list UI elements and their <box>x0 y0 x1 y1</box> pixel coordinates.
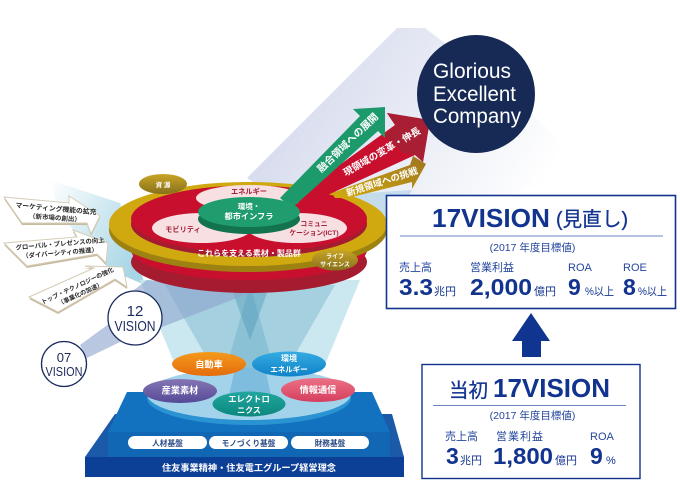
panel: revised 17VISION: %以上 <box>585 285 614 298</box>
goal circle: Glorious Excellent Company: Excellent <box>433 82 516 106</box>
panel: revised 17VISION: (見直し) <box>556 208 628 231</box>
ellipse: communication <box>247 213 347 243</box>
icon: 07 VISION circle: VISION <box>46 364 82 379</box>
ellipse: industrial materials: 産業素材 <box>162 384 198 396</box>
lower light beams <box>140 280 360 372</box>
panel: initial 17VISION: (2017 年度目標値) <box>490 409 575 422</box>
panel: revised 17VISION: ROA <box>568 262 592 274</box>
arrow: gold new fields: 新規領域への挑戦 <box>345 165 420 198</box>
ellipse: energy <box>196 185 302 211</box>
ellipse: communication: ケーション(ICT) <box>289 229 339 237</box>
ellipse: life science: ライフ <box>326 254 344 260</box>
goal circle: Glorious Excellent Company: Company <box>433 104 521 128</box>
ellipse: industrial materials <box>143 379 217 403</box>
arrow: marketing: （新市場の創出） <box>29 211 81 224</box>
panel: revised 17VISION: 2,000 <box>470 274 532 300</box>
icon: 12 VISION circle <box>108 291 162 345</box>
ellipse: environment energy: エネルギー <box>270 365 308 374</box>
ellipse: electronics: エレクトロ <box>228 394 270 404</box>
arrow: top technology: トップ・テクノロジーの強化 <box>40 266 115 306</box>
panel: revised 17VISION: 17VISION <box>432 203 550 233</box>
panel: revised 17VISION: %以上 <box>638 285 667 298</box>
panel: initial 17VISION: 億円 <box>555 454 577 467</box>
panel: initial 17VISION: 売上高 <box>445 429 478 443</box>
pill: finance: 財務基盤 <box>315 438 346 448</box>
arrow: top technology: （事業化の加速） <box>57 280 104 308</box>
panel: revised 17VISION: 9 <box>568 274 581 300</box>
arrow: up from initial to revised <box>512 313 550 357</box>
arrow: red existing fields: 現領域の変革・伸長 <box>341 124 423 179</box>
goal circle: Glorious Excellent Company <box>417 35 535 153</box>
stacked disc <box>109 182 387 293</box>
ellipse: electronics <box>212 392 286 416</box>
ellipse: mobility <box>152 213 252 243</box>
platform: base tiers: 住友事業精神・住友電工グループ経営理念 <box>162 462 336 473</box>
ellipse: automotive: 自動車 <box>195 358 223 370</box>
ellipse: electronics: ニクス <box>237 405 261 415</box>
panel: initial 17VISION: 9 <box>590 443 603 469</box>
panel: revised 17VISION: ROE <box>623 262 647 274</box>
vision progress band <box>80 280 250 358</box>
arrow: global presence: グローバル・プレゼンスの向上 <box>15 235 106 252</box>
ellipse: resources <box>139 174 187 194</box>
panel: initial 17VISION: ROA <box>590 431 614 443</box>
ellipse: communication: コミュニ <box>300 220 328 228</box>
arrow: global presence <box>4 230 108 268</box>
upward lavender beam <box>247 28 590 240</box>
ellipse: automotive <box>172 352 246 376</box>
arrow: top technology <box>29 266 127 314</box>
ellipse: info comm <box>281 378 355 402</box>
panel: initial 17VISION: 3 <box>446 443 459 469</box>
icon: 07 VISION circle <box>42 342 86 386</box>
ellipse: life science: サイエンス <box>320 262 350 268</box>
panel: revised 17VISION: (2017 年度目標値) <box>490 241 575 254</box>
panel: initial 17VISION: % <box>606 455 616 467</box>
pill: manufacturing <box>209 436 288 449</box>
panel: initial 17VISION: 17VISION <box>493 373 610 403</box>
ellipse: environment energy: 環境 <box>281 353 297 363</box>
panel: initial 17VISION <box>422 364 640 478</box>
panel: initial 17VISION: 営業利益 <box>496 429 543 443</box>
icon: 07 VISION circle: 07 <box>57 350 71 365</box>
ellipse: energy: エネルギー <box>231 187 267 196</box>
arrow: global presence: （ダイバーシティの推進） <box>22 245 98 260</box>
stacked disc: これらを支える素材・製品群 <box>197 248 301 258</box>
arrow: gold new fields <box>332 156 426 198</box>
icon: 12 VISION circle: 12 <box>127 303 143 320</box>
pill: finance <box>291 436 369 449</box>
left cyan fan <box>50 180 145 285</box>
pale blue wedge behind arrows <box>335 190 412 235</box>
ellipse: info comm: 情報通信 <box>300 384 336 395</box>
pill: manufacturing: モノづくり基盤 <box>222 438 276 448</box>
arrow: marketing: マーケティング機能の拡充 <box>15 200 97 217</box>
pill: human resources <box>128 436 207 449</box>
ellipse: life science <box>312 250 358 270</box>
ellipse: green environment infrastructure: 都市インフラ <box>225 211 273 221</box>
arrow: marketing <box>4 196 100 236</box>
panel: revised 17VISION: 兆円 <box>434 285 456 298</box>
panel: revised 17VISION <box>386 196 676 308</box>
panel: revised 17VISION: 3.3 <box>399 274 433 300</box>
panel: initial 17VISION: 兆円 <box>460 454 482 467</box>
ellipse: green environment infrastructure <box>198 197 300 234</box>
panel: revised 17VISION: 営業利益 <box>470 260 514 274</box>
ellipse: mobility: モビリティ <box>165 225 201 234</box>
ellipse: environment energy <box>252 352 326 376</box>
panel: revised 17VISION: 億円 <box>534 285 556 298</box>
ellipse: resources: 資 源 <box>156 180 171 189</box>
panel: revised 17VISION: 売上高 <box>399 260 432 274</box>
arrow: green fusion fields <box>280 107 385 208</box>
arrow: green fusion fields: 融合領域への展開 <box>314 110 381 175</box>
panel: revised 17VISION: 8 <box>623 274 636 300</box>
goal circle: Glorious Excellent Company: Glorious <box>433 59 511 83</box>
panel: initial 17VISION: 当初 <box>449 380 488 402</box>
arrow: red existing fields <box>291 113 430 205</box>
platform: light disc <box>147 368 351 425</box>
platform: base tiers <box>85 392 404 477</box>
pill: human resources: 人材基盤 <box>152 438 183 448</box>
panel: initial 17VISION: 1,800 <box>493 443 553 469</box>
ellipse: green environment infrastructure: 環境・ <box>238 201 260 211</box>
icon: 12 VISION circle: VISION <box>114 318 156 335</box>
